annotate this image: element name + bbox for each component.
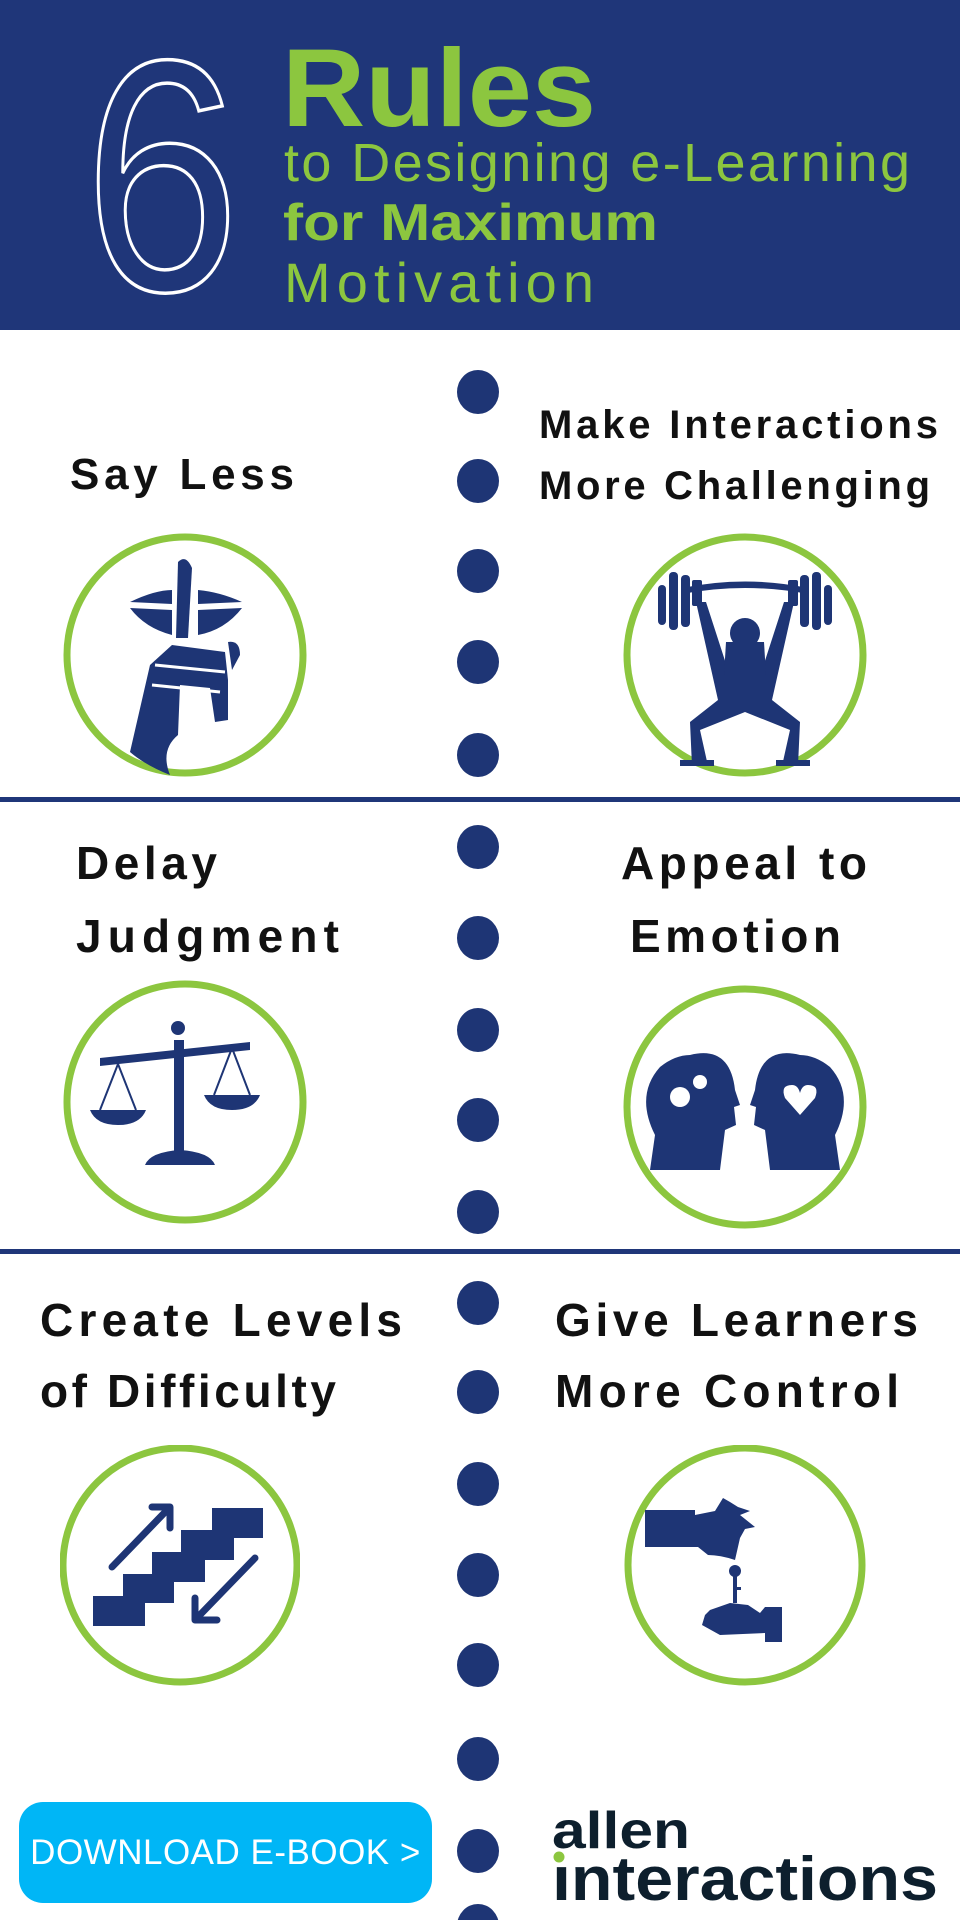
logo: allen interactions: [552, 1802, 938, 1910]
heading: Delay Judgment: Judgment: [76, 910, 339, 962]
heading: Give Learners More Control: More Control: [555, 1365, 899, 1417]
heading: Give Learners More Control: [555, 1294, 918, 1417]
logo: allen interactions: allen: [552, 1802, 690, 1860]
subtitle line 1: to Designing e-Learning: [284, 133, 910, 193]
heading: Give Learners More Control: Give Learners: [555, 1294, 918, 1346]
title: Rules: Rules: [282, 27, 596, 150]
heading: Make Interactions More Challenging: More Challenging: [539, 464, 930, 508]
heading: Create Levels of Difficulty: [40, 1294, 402, 1417]
big outlined 6: 6: [84, 0, 240, 360]
heading: Appeal to Emotion: [621, 837, 867, 962]
subtitle line 3: Motivation: [284, 251, 594, 314]
icon: hand giving key: [624, 1445, 866, 1686]
icon: scales: [64, 980, 306, 1224]
icon: stairs: [60, 1445, 300, 1686]
heading: Appeal to Emotion: Appeal to: [621, 837, 867, 889]
heading: Make Interactions More Challenging: Make Interactions: [539, 403, 938, 447]
header banner: [0, 0, 960, 330]
subtitle line 2: for Maximum: [283, 194, 658, 252]
button: download e-book: DOWNLOAD E-BOOK >: [30, 1833, 421, 1872]
heading: Delay Judgment: [76, 837, 339, 962]
dotted timeline: [457, 370, 499, 1920]
button: download e-book: [19, 1802, 432, 1903]
icon: two heads: [624, 986, 866, 1228]
heading: Create Levels of Difficulty: of Difficulty: [40, 1365, 336, 1417]
heading: Say Less: Say Less: [70, 450, 294, 499]
heading: Appeal to Emotion: Emotion: [630, 910, 841, 962]
heading: Make Interactions More Challenging: [539, 403, 938, 508]
divider lines: [0, 797, 960, 802]
icon: weightlifter: [624, 534, 866, 776]
icon: shush: [64, 534, 306, 776]
heading: Create Levels of Difficulty: Create Levels: [40, 1294, 402, 1346]
heading: Delay Judgment: Delay: [76, 837, 217, 889]
